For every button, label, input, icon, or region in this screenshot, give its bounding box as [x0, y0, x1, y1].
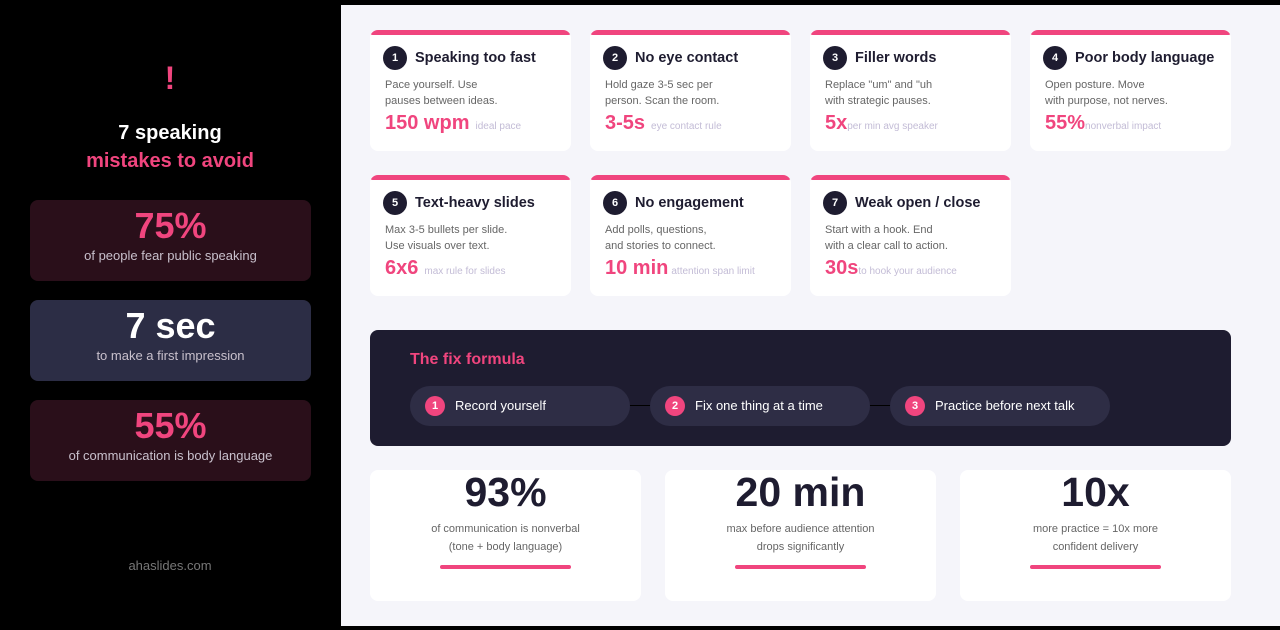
card 1: [370, 30, 571, 151]
card 1: 1: [392, 52, 398, 64]
card 7: Start with a hook. End: [825, 224, 933, 236]
card 3: with strategic pauses.: [825, 95, 931, 107]
card 3: 5xper min avg speaker: [825, 112, 938, 134]
step 1: 1: [432, 400, 438, 412]
step 1: Record yourself: [455, 398, 546, 413]
card 2: No eye contact: [635, 50, 738, 66]
card 5: Use visuals over text.: [385, 240, 490, 252]
card 1: Pace yourself. Use: [385, 79, 477, 91]
card 7: with a clear call to action.: [825, 240, 948, 252]
stat: 7 sec: [30, 300, 311, 381]
card 3: Replace "um" and "uh: [825, 79, 932, 91]
stat: 55%: of communication is body language: [69, 448, 272, 463]
step 3: [890, 386, 1110, 426]
bottom stat 20 min: max before audience attention: [726, 523, 874, 535]
card 5: 6x6 max rule for slides: [385, 257, 506, 279]
card 5: Text-heavy slides: [415, 195, 535, 211]
bottom stat 20 min: [665, 470, 936, 601]
card 6: Add polls, questions,: [605, 224, 707, 236]
step 2: Fix one thing at a time: [695, 398, 823, 413]
panel: left sidebar: [30, 60, 311, 573]
card 7: 30sto hook your audience: [825, 257, 957, 279]
bottom stat 10x: 10x: [1061, 469, 1130, 515]
bottom stat 20 min: 20 min: [736, 469, 865, 515]
card 2: person. Scan the room.: [605, 95, 719, 107]
card 4: 4: [1052, 52, 1058, 64]
card 6: 6: [612, 197, 618, 209]
title: [86, 122, 254, 172]
card 5: 5: [392, 197, 398, 209]
bottom stat 93%: (tone + body language): [449, 541, 562, 553]
card 2: Hold gaze 3-5 sec per: [605, 79, 713, 91]
card 6: [590, 175, 791, 296]
step 2: [650, 386, 870, 426]
step 2: 2: [672, 400, 678, 412]
card 5: [370, 175, 571, 296]
footer: ahaslides.com: [128, 558, 212, 573]
card 2: 2: [612, 52, 618, 64]
bottom stat 93%: [370, 470, 641, 601]
stat: 55%: [30, 400, 311, 481]
step 1: [410, 386, 630, 426]
card 3: [810, 30, 1011, 151]
card 3: 3: [832, 52, 838, 64]
panel: main: [341, 5, 1280, 626]
card 2: 3-5s eye contact rule: [605, 112, 722, 134]
card 3: Filler words: [855, 50, 936, 66]
panel: fix formula: [370, 330, 1231, 446]
card 1: 150 wpm ideal pace: [385, 112, 521, 134]
card 7: Weak open / close: [855, 195, 980, 211]
stat: 75%: [30, 200, 311, 281]
step 3: 3: [912, 400, 918, 412]
card 1: pauses between ideas.: [385, 95, 498, 107]
card 4: with purpose, not nerves.: [1045, 95, 1168, 107]
bottom stat 93%: of communication is nonverbal: [431, 523, 580, 535]
step 3: Practice before next talk: [935, 398, 1074, 413]
card 6: and stories to connect.: [605, 240, 716, 252]
icon: exclamation: !: [165, 60, 175, 96]
card 4: [1030, 30, 1231, 151]
card 7: 7: [832, 197, 838, 209]
stat: 7 sec: to make a first impression: [96, 348, 245, 363]
stat: 75%: 75%: [134, 205, 207, 246]
heading: The fix formula: [410, 351, 525, 368]
bottom stat 10x: confident delivery: [1053, 541, 1138, 553]
bottom stat 10x: more practice = 10x more: [1033, 523, 1158, 535]
stat: 75%: of people fear public speaking: [84, 248, 257, 263]
stat: 7 sec: 7 sec: [125, 305, 216, 346]
card 6: 10 min attention span limit: [605, 257, 755, 279]
card 4: Poor body language: [1075, 50, 1214, 66]
card 1: Speaking too fast: [415, 50, 536, 66]
bottom stat 93%: 93%: [464, 469, 547, 515]
title: 7 speaking: [118, 122, 222, 144]
title: mistakes to avoid: [86, 150, 254, 172]
card 4: 55%nonverbal impact: [1045, 112, 1161, 134]
card 5: Max 3-5 bullets per slide.: [385, 224, 507, 236]
card 4: Open posture. Move: [1045, 79, 1145, 91]
card 6: No engagement: [635, 195, 744, 211]
bottom stat 10x: [960, 470, 1231, 601]
card 7: [810, 175, 1011, 296]
bottom stat 20 min: drops significantly: [757, 541, 844, 553]
stat: 55%: 55%: [134, 405, 207, 446]
card 2: [590, 30, 791, 151]
